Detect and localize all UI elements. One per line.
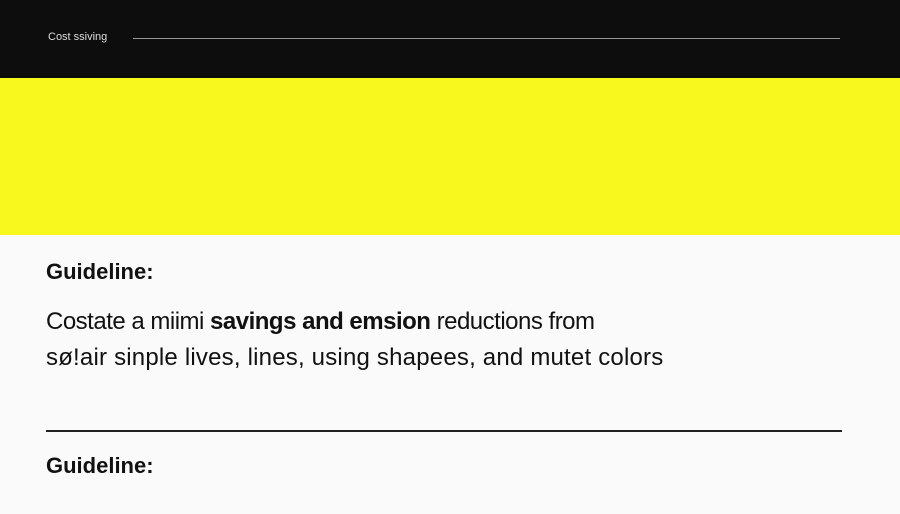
divider rule (46, 430, 842, 432)
heading: guideline 2: Guideline: (46, 453, 154, 478)
body text: sø!air sinple lives, lines, using shapees, and mutet colors (46, 344, 663, 371)
header bar (0, 0, 900, 78)
header label: Cost ssiving (48, 31, 107, 43)
yellow banner (0, 78, 900, 235)
heading: guideline 1: Guideline: (46, 259, 154, 284)
body text (46, 308, 663, 371)
body text: Costate a miimi savings and emsion reductions from (46, 308, 595, 335)
header rule (133, 38, 840, 39)
